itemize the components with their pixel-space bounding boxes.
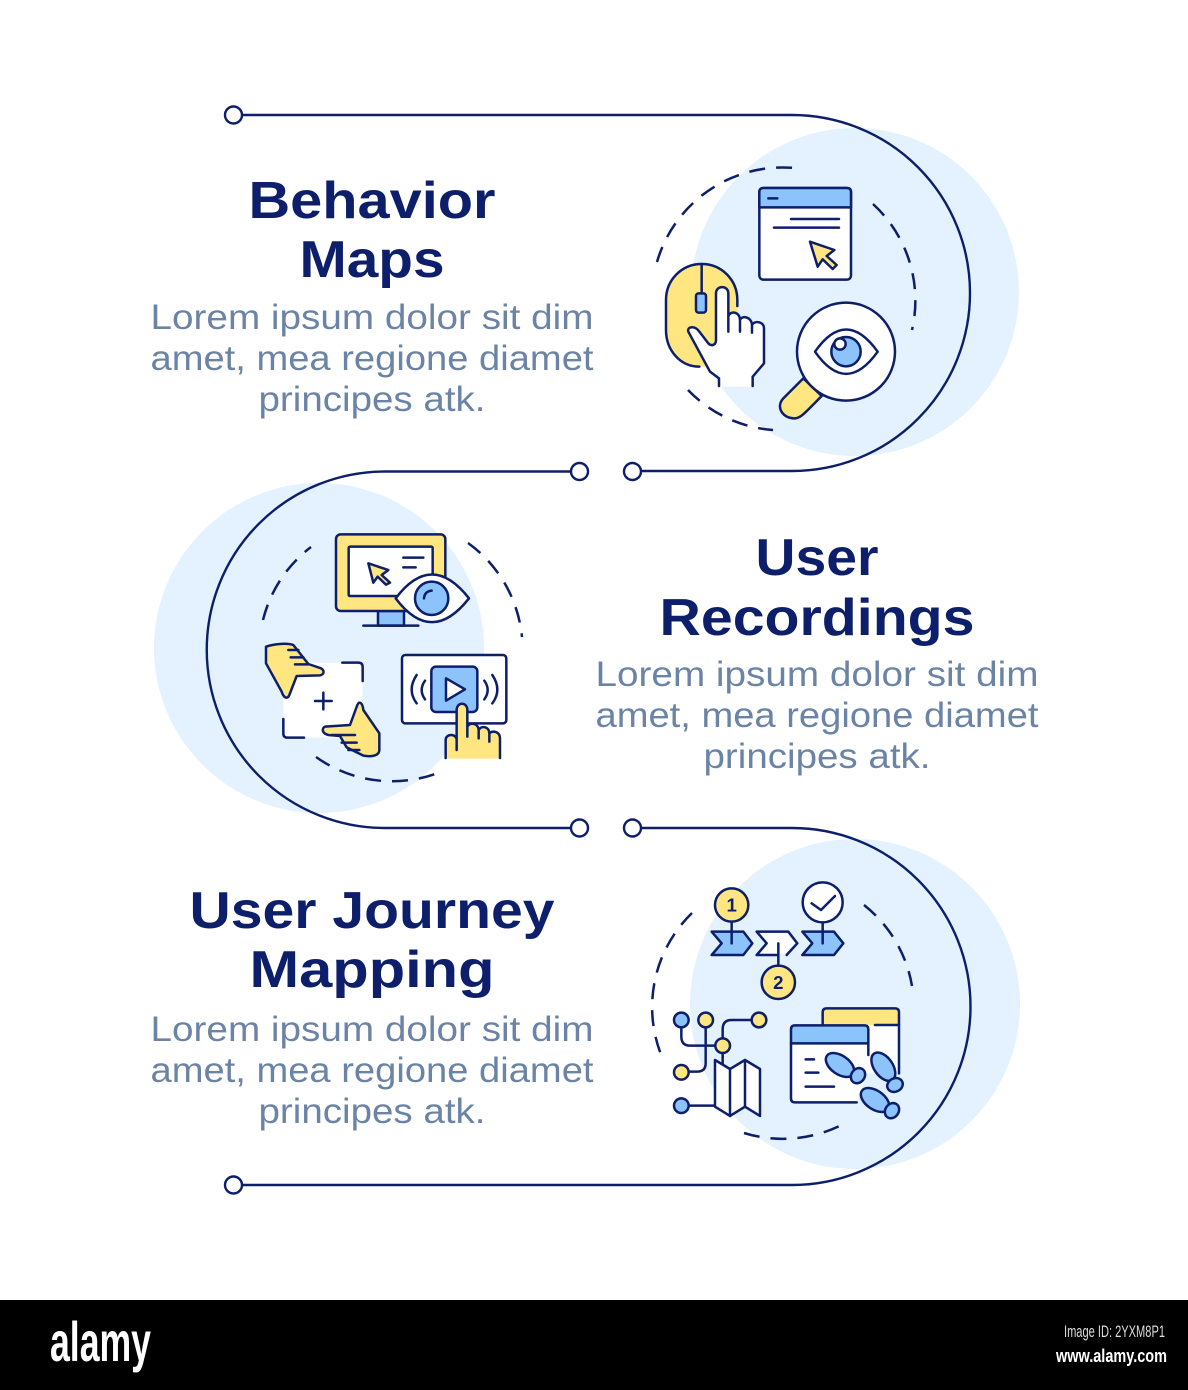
heading: User Recordings: Recordings: [660, 589, 974, 647]
text block: User Recordings description: principes atk.: [704, 737, 930, 776]
connector line: top section: [225, 106, 970, 480]
heading: Behavior Maps: Behavior: [248, 172, 496, 230]
text block: User Journey Mapping description: Lorem ipsum dolor sit dim: [150, 1010, 594, 1049]
icon: monitor with eye: [336, 534, 469, 626]
icon group: user journey mapping: [674, 882, 905, 1121]
watermark logo: alamy: [50, 1310, 151, 1373]
text block: User Journey Mapping description: [150, 1010, 594, 1131]
text block: Behavior Maps description: Lorem ipsum dolor sit dim: [150, 298, 594, 337]
text block: Behavior Maps description: [150, 298, 594, 419]
text block: Behavior Maps description: amet, mea regione diamet: [150, 339, 594, 378]
heading: User Journey Mapping: [190, 882, 555, 999]
text block: Behavior Maps description: principes atk.: [258, 380, 486, 419]
icon: journey steps with pins: 1: [726, 895, 737, 916]
text block: User Journey Mapping description: amet, mea regione diamet: [150, 1051, 594, 1090]
heading: User Journey Mapping: Mapping: [250, 941, 494, 999]
background circle: user journey mapping: [690, 839, 1020, 1169]
heading: User Recordings: User: [756, 529, 878, 587]
icon group: behavior maps: [666, 188, 895, 418]
text block: User Journey Mapping description: principes atk.: [258, 1092, 486, 1131]
icon group: user recordings: [266, 534, 506, 759]
heading: User Journey Mapping: User Journey: [190, 882, 555, 940]
dashed ring: user recordings: [263, 543, 522, 781]
icon: route network and folded map: [674, 1013, 766, 1116]
footer bar: [0, 1300, 1188, 1390]
text block: User Recordings description: amet, mea regione diamet: [596, 696, 1039, 735]
background circle: user recordings: [154, 483, 484, 813]
icon: hand clicking mouse: [666, 264, 764, 387]
text block: User Recordings description: Lorem ipsum dolor sit dim: [596, 655, 1038, 694]
background circle: behavior maps: [691, 128, 1019, 456]
heading: User Recordings: [660, 529, 974, 647]
icon: browser windows with footprints: [791, 1008, 905, 1121]
icon: magnifier with eye: [780, 303, 895, 418]
icon: journey steps with pins: [712, 882, 843, 999]
dashed ring: user journey mapping: [652, 905, 912, 1139]
connector line: middle section: [207, 463, 588, 836]
text block: User Recordings description: [596, 655, 1039, 776]
icon: play button with pressing finger: [402, 655, 506, 759]
icon: journey steps with pins: 2: [773, 972, 784, 993]
heading: Behavior Maps: Maps: [300, 231, 444, 289]
icon: browser window with cursor: [759, 188, 851, 280]
dashed ring: behavior maps: [657, 167, 915, 430]
connector line: bottom section: [225, 820, 971, 1194]
heading: Behavior Maps: [248, 172, 496, 289]
icon: hands framing a selection: [266, 644, 379, 756]
